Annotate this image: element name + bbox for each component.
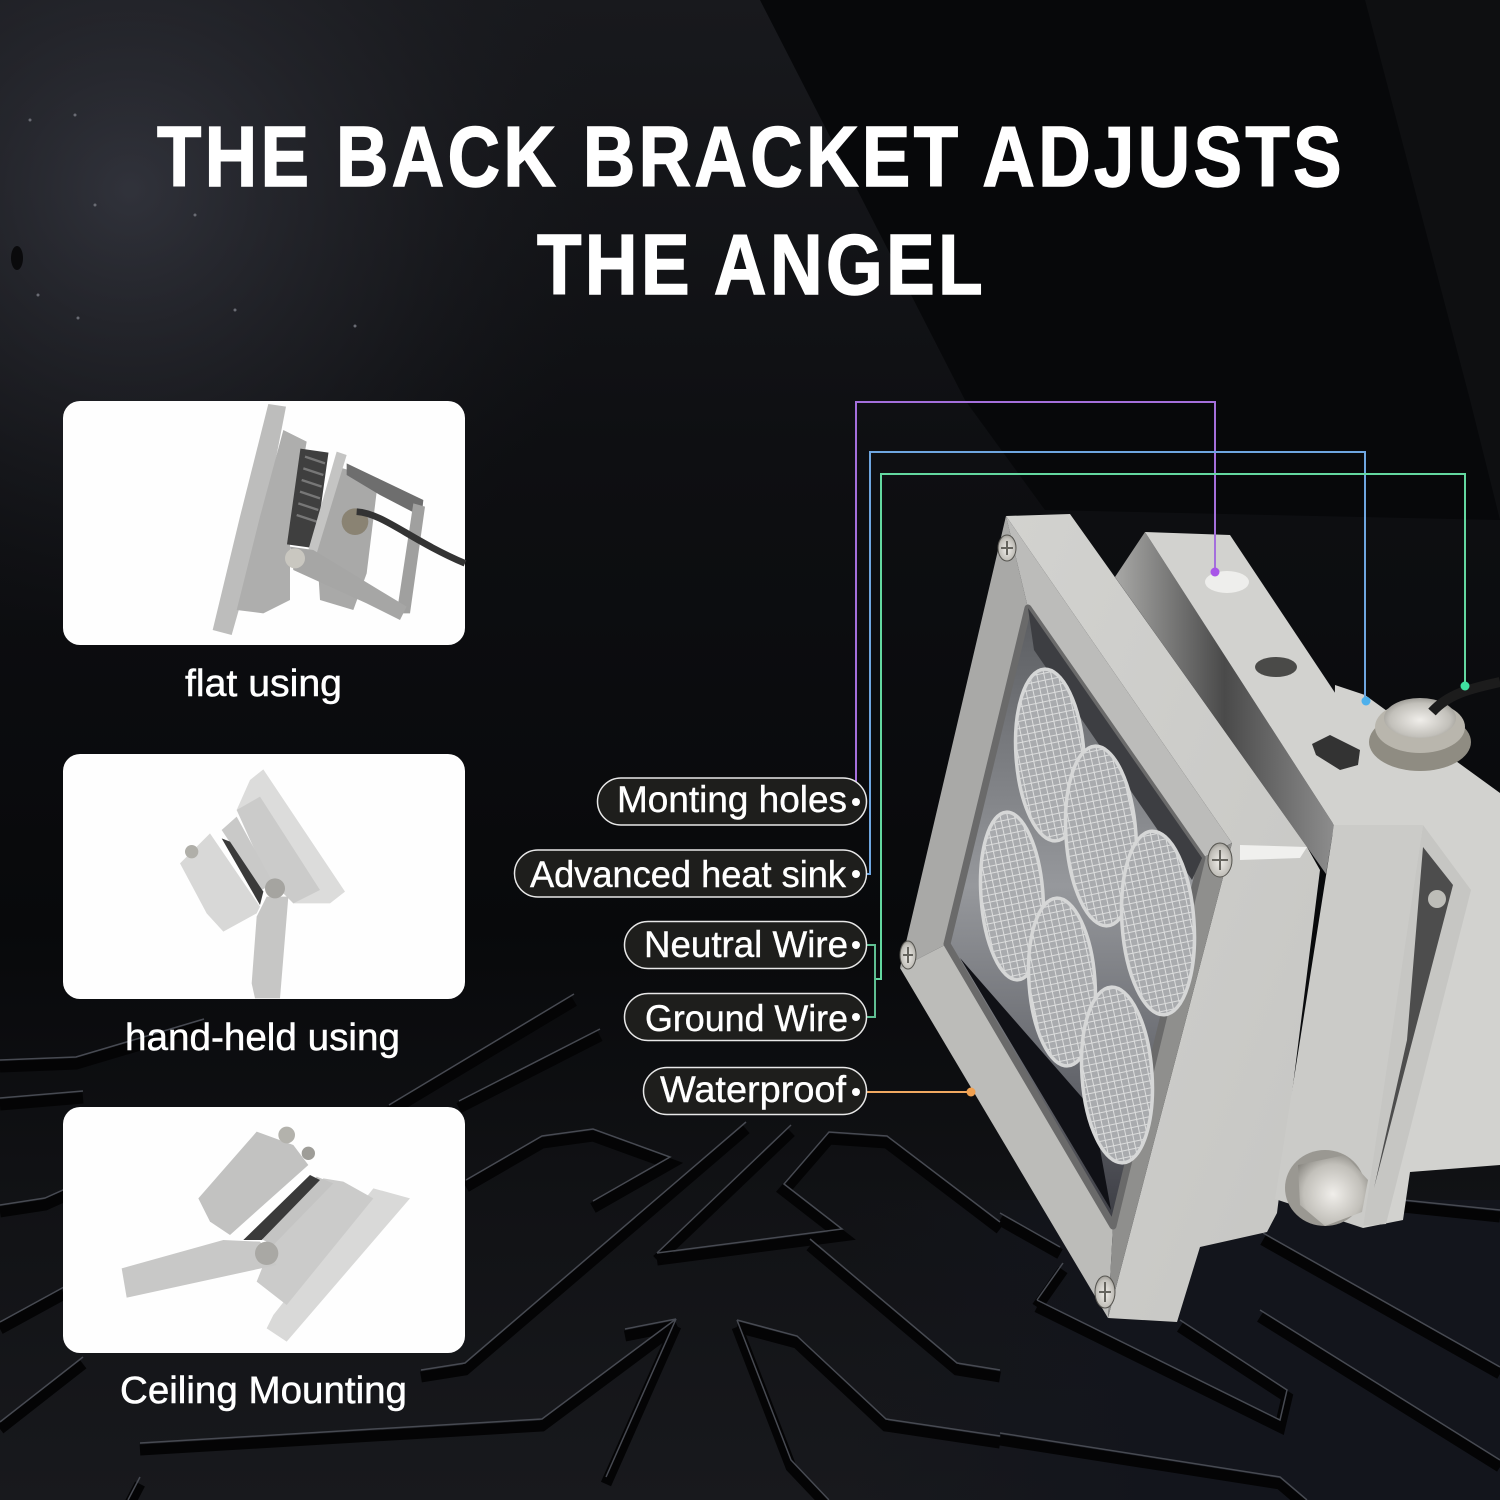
screws [900,535,1232,1308]
label: Monting holes: Monting holes [617,779,847,820]
label: Advanced heat sink: Advanced heat sink [530,854,846,895]
label: Ground Wire: Ground Wire [645,998,848,1039]
main product: floodlight [900,514,1500,1322]
bracket top strap [1145,532,1423,825]
panel: hand-held using [63,754,465,999]
caption: flat using: flat using [185,663,342,705]
gap behind bracket [1115,532,1334,874]
housing side [1006,514,1320,1322]
title: THE ANGEL [537,218,986,313]
label: Waterproof: Waterproof [660,1069,847,1110]
back box [1330,685,1500,1228]
panel: flat using [63,401,465,645]
title [157,110,1345,313]
icon: lamp side view with cable [213,404,465,635]
label: Neutral Wire: Neutral Wire [644,924,848,965]
cable gland [1369,682,1500,771]
hex bolt [1285,1150,1368,1226]
panel: ceiling mounting [63,1107,465,1353]
icon: lamp ceiling view [122,1127,410,1342]
icon: lamp hand-held view [180,769,345,998]
glass window [947,608,1202,1226]
bracket side strap [1275,825,1423,1228]
front frame bands [900,516,1232,1318]
caption: hand-held using: hand-held using [125,1017,400,1059]
LED lenses [975,667,1200,1165]
connector lines [856,402,1465,1092]
caption: ceiling mounting: Ceiling Mounting [120,1370,407,1412]
connector end dots [966,568,1470,1096]
